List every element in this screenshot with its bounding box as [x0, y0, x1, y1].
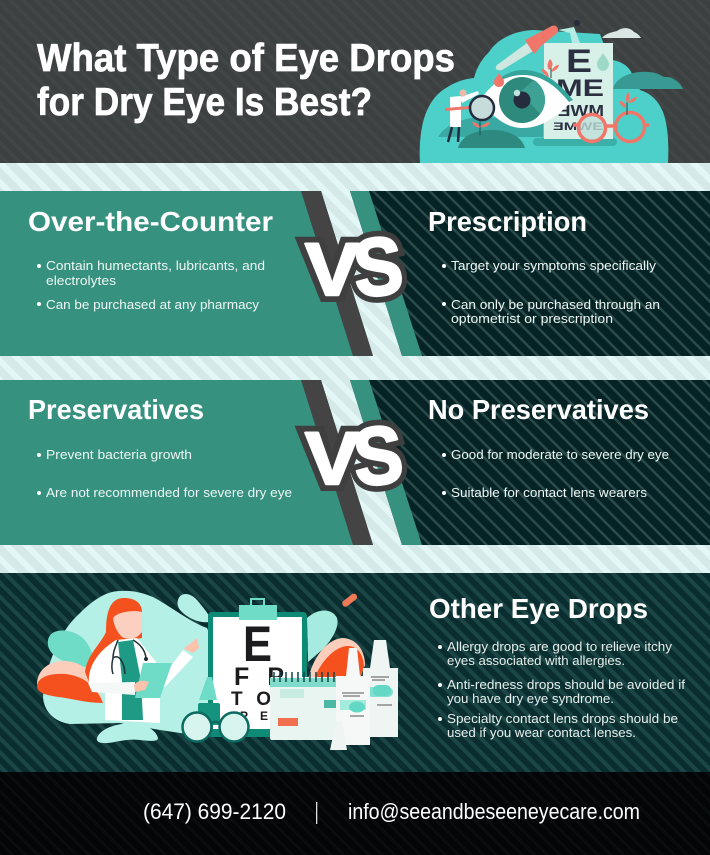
VS badge 1: V: [305, 229, 359, 311]
eye chart: ME: [556, 75, 604, 102]
calendar: [270, 672, 340, 740]
list: other eye drops: [438, 639, 685, 740]
list: over-the-counter: Contain humectants, lubricants, and: [46, 258, 265, 273]
list: preservatives: [37, 447, 292, 500]
eye chart: [544, 43, 613, 139]
VS badge 1: [305, 218, 407, 315]
chart clipboard: P E: [240, 709, 268, 723]
dropper: [496, 20, 580, 70]
header background: [0, 0, 710, 163]
list: over-the-counter: [37, 258, 265, 312]
small bottle: [198, 677, 220, 725]
glasses: [573, 112, 649, 142]
title: [37, 37, 455, 124]
email: info@seeandbeseeneyecare.com: [348, 799, 640, 824]
VS badge 2: V: [305, 418, 359, 500]
list: preservatives: Are not recommended for severe dry eye: [46, 485, 292, 500]
plants: [472, 59, 637, 135]
panel: other eye drops: [0, 573, 710, 772]
VS badge 2: S: [349, 407, 407, 504]
VS badge 1: S: [349, 218, 407, 315]
list: preservatives: Prevent bacteria growth: [46, 447, 192, 462]
list: over-the-counter: electrolytes: [46, 273, 117, 288]
light band 3: [0, 545, 710, 573]
list: other eye drops: you have dry eye syndrome.: [447, 691, 614, 706]
title: What Type of Eye Drops: [37, 37, 455, 80]
eye chart: E: [566, 43, 592, 79]
list: other eye drops: Anti-redness drops should be avoided if: [447, 677, 685, 692]
illustration: doctor with eye chart: [37, 591, 398, 750]
eye chart: ƎWM: [558, 103, 604, 120]
doctor with magnifier: [445, 90, 494, 142]
list: no preservatives: [442, 447, 669, 500]
heading: over-the-counter: Over-the-Counter: [28, 206, 273, 237]
list: other eye drops: Allergy drops are good to relieve itchy: [447, 639, 673, 654]
VS badge 2: [305, 407, 407, 504]
heading: no preservatives: No Preservatives: [428, 394, 649, 425]
list: other eye drops: used if you wear contact lenses.: [447, 725, 636, 740]
panel: preservatives: [0, 380, 710, 545]
illustration: eye exam header: [420, 20, 683, 163]
chart clipboard: E: [243, 616, 272, 672]
chart clipboard: T O: [231, 689, 271, 710]
heading: preservatives: Preservatives: [28, 394, 204, 425]
VS badge 2: S: [349, 407, 407, 504]
list: other eye drops: eyes associated with allergies.: [447, 653, 625, 668]
heading: other eye drops: Other Eye Drops: [429, 593, 648, 624]
list: over-the-counter: Can be purchased at any pharmacy: [46, 297, 260, 312]
list: prescription: Target your symptoms specifically: [451, 258, 657, 273]
light band 1: [0, 163, 710, 191]
footer divider: [316, 802, 317, 824]
light band 2: [0, 356, 710, 380]
eye: [480, 70, 573, 128]
list: no preservatives: Suitable for contact lens wearers: [451, 485, 648, 500]
phone number: (647) 699-2120: [143, 799, 286, 824]
round glasses: [182, 712, 248, 742]
list: prescription: [442, 258, 660, 326]
heading: prescription: Prescription: [428, 206, 587, 237]
footer: [0, 772, 710, 855]
VS badge 1: S: [349, 218, 407, 315]
panel: prescription: [350, 191, 710, 356]
VS badge 1: V: [305, 229, 359, 311]
VS badge 2: V: [305, 418, 359, 500]
chart clipboard: [208, 599, 307, 737]
list: prescription: optometrist or prescription: [451, 311, 613, 326]
coral pill: [341, 592, 358, 608]
panel: no preservatives: [350, 380, 710, 545]
bottles: [330, 640, 398, 750]
panel: over-the-counter: [0, 191, 710, 356]
right blobs: [307, 610, 338, 662]
title: for Dry Eye Is Best?: [37, 81, 372, 124]
list: no preservatives: Good for moderate to severe dry eye: [451, 447, 669, 462]
doctor: [85, 598, 199, 723]
list: prescription: Can only be purchased through an: [451, 297, 660, 312]
chart clipboard: F P: [234, 663, 284, 691]
eye chart: ƎMWE: [553, 121, 603, 133]
list: other eye drops: Specialty contact lens drops should be: [447, 711, 678, 726]
